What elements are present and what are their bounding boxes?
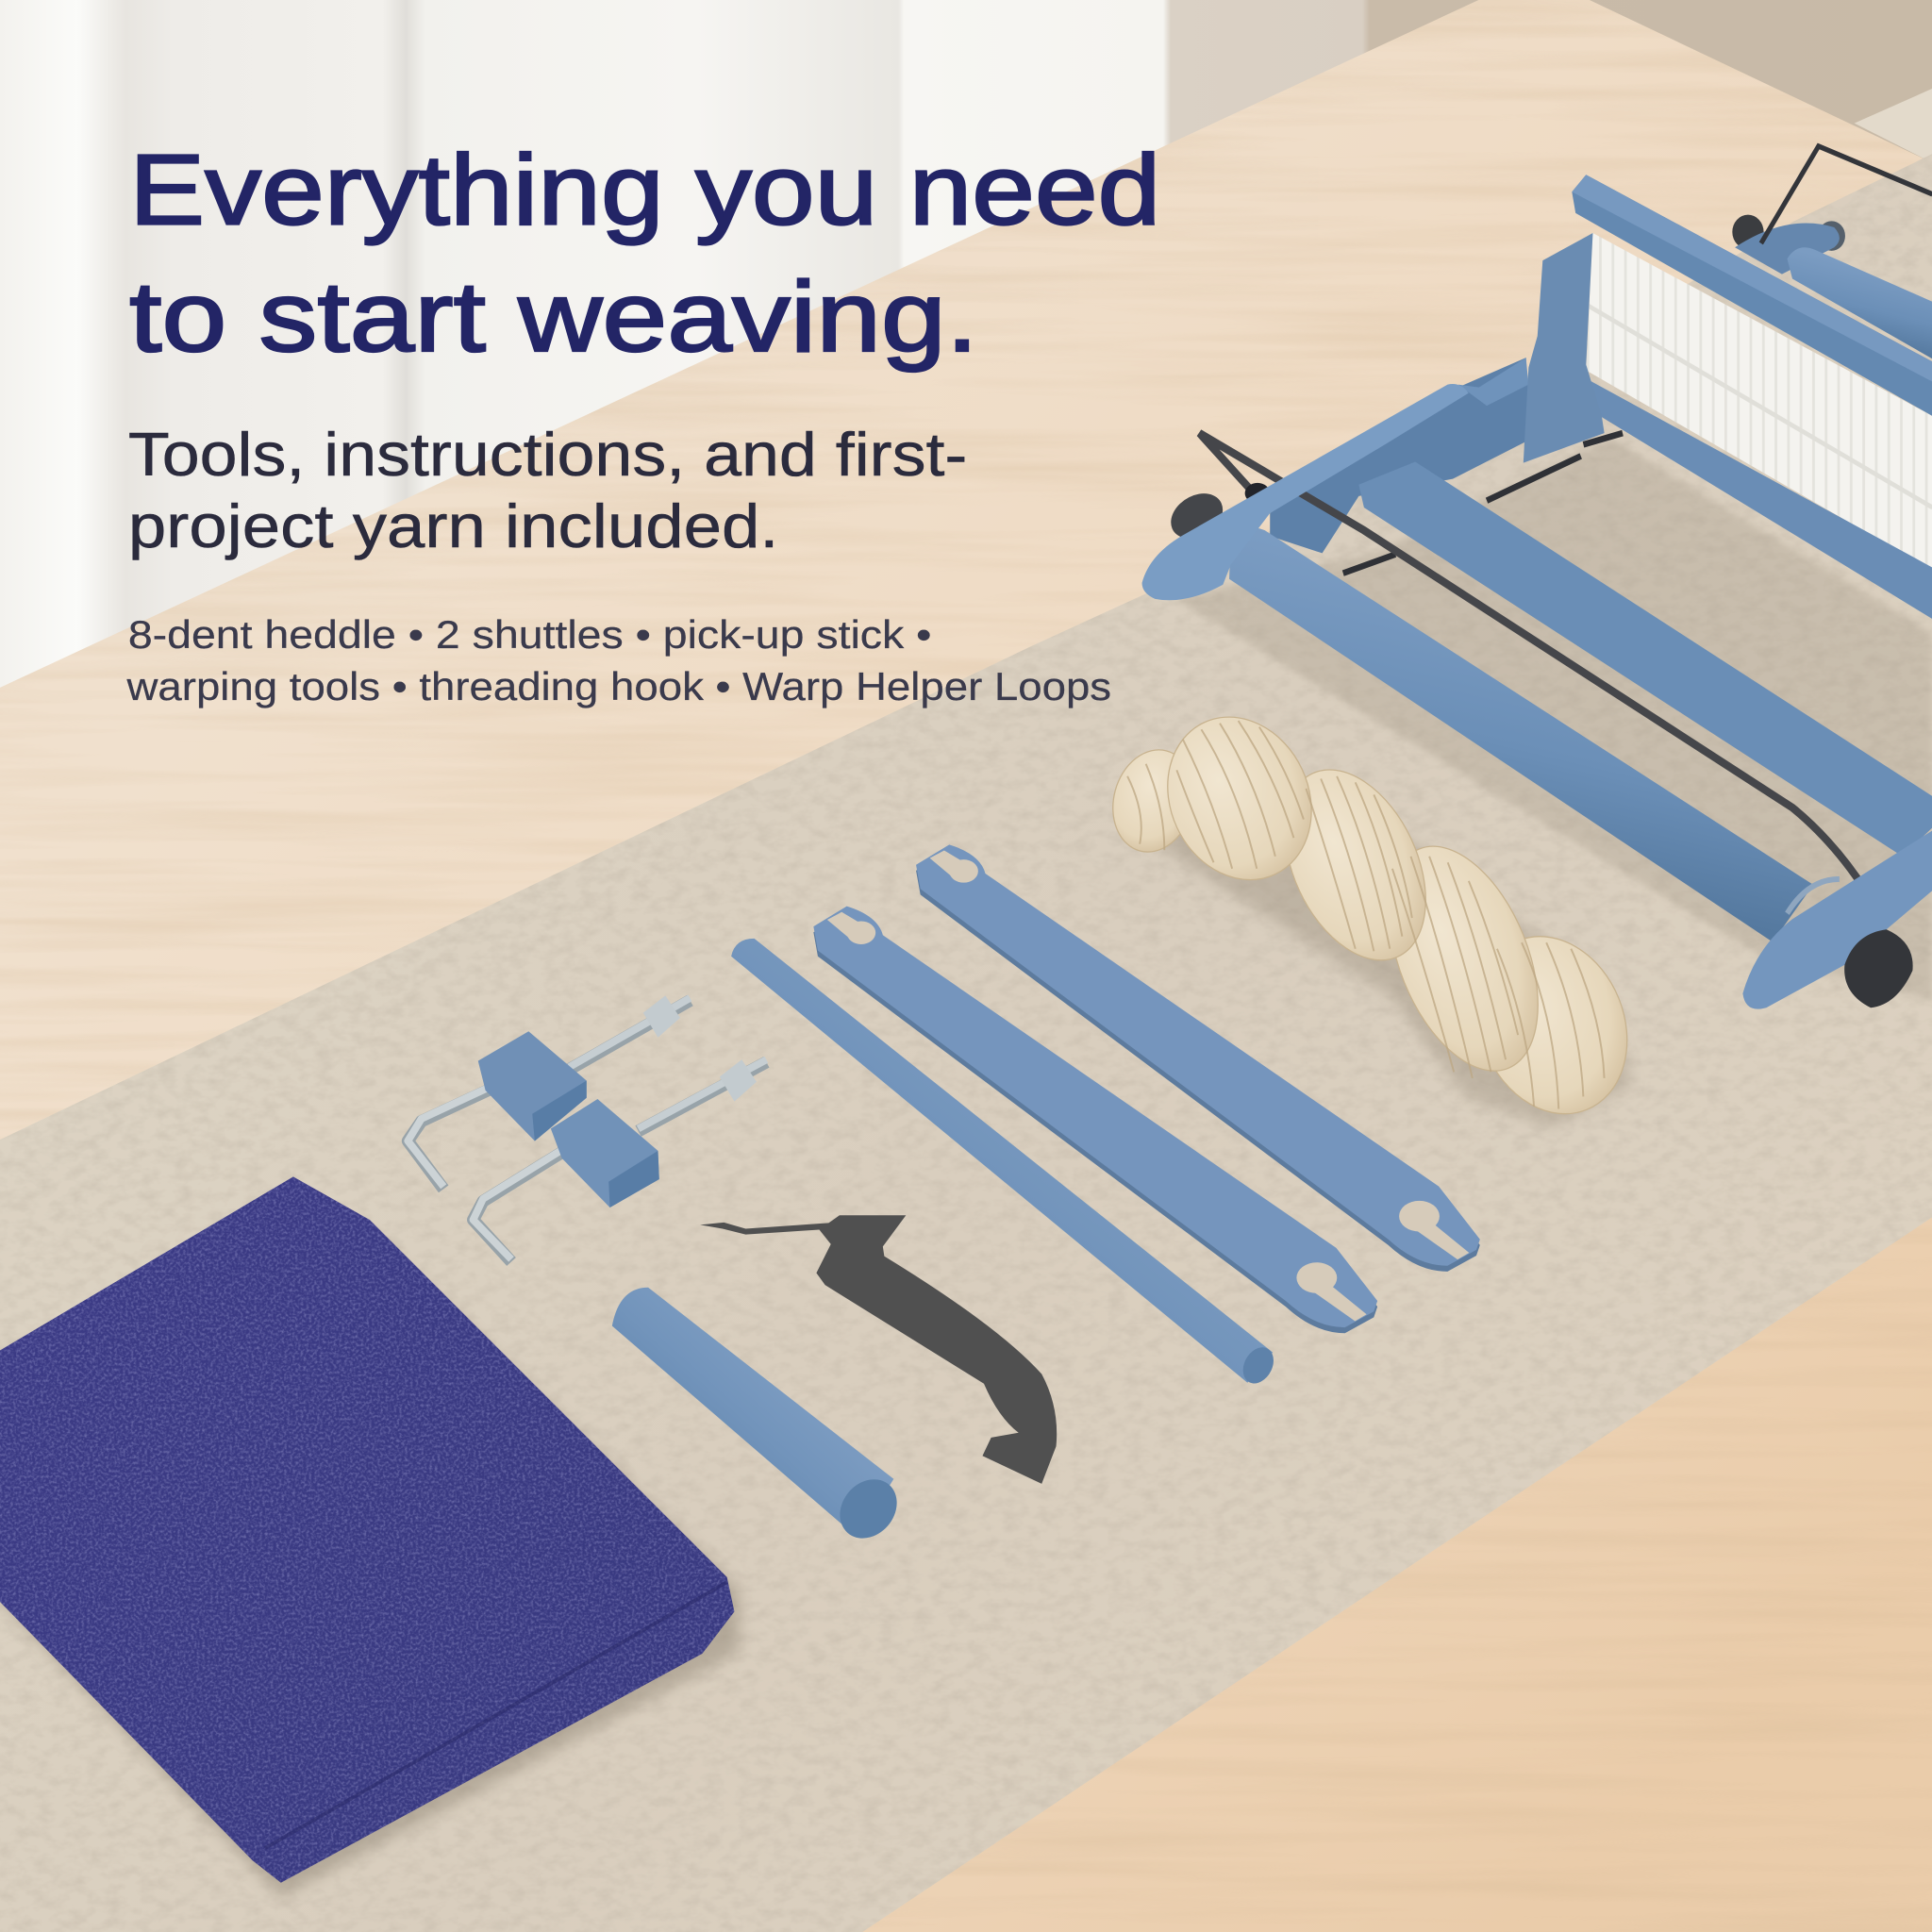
right knob <box>1844 929 1913 1008</box>
skein of yarn <box>1102 693 1653 1137</box>
rigid heddle loom <box>1142 146 1932 1009</box>
block <box>551 1099 659 1208</box>
yarn strands <box>1127 721 1605 1109</box>
included items list: 8-dent heddle • 2 shuttles • pick-up stick • <box>128 612 931 657</box>
pick-up stick <box>731 939 1278 1385</box>
subheading <box>128 420 967 560</box>
heading <box>129 135 1160 373</box>
towel shadow <box>0 1232 740 1897</box>
left pod <box>1142 384 1469 600</box>
included items list: warping tools • threading hook • Warp Helper Loops <box>125 664 1111 708</box>
folded purple towel <box>0 1158 752 1897</box>
frame rail highlight <box>1458 358 1528 406</box>
subheading: project yarn included. <box>128 491 778 560</box>
threading hook <box>700 1215 1057 1484</box>
towel body <box>0 1176 734 1883</box>
heading: to start weaving. <box>129 261 978 373</box>
heddle top bar <box>1572 175 1932 416</box>
background: curtain and wall <box>0 0 1932 740</box>
included items list <box>125 612 1111 708</box>
yarn twists <box>1102 693 1653 1137</box>
warping clamp 2 <box>474 1059 766 1261</box>
under rods <box>1343 433 1623 574</box>
back knob and pod <box>1732 215 1845 275</box>
towel texture <box>0 1158 752 1897</box>
wire ends <box>1245 483 1878 898</box>
weaving tools laid out on runner <box>612 844 1480 1541</box>
yarn shadow <box>1146 764 1633 1127</box>
front roller <box>1229 527 1840 942</box>
heddle teeth <box>1586 233 1932 571</box>
heddle block <box>1524 233 1605 463</box>
left knob <box>1164 485 1229 547</box>
rear shuttle <box>916 844 1480 1272</box>
middle beam <box>1358 461 1932 857</box>
shuttle notches <box>930 850 1469 1259</box>
side frame <box>1270 358 1531 553</box>
front shuttle <box>813 907 1377 1333</box>
loom shadow <box>1176 439 1932 999</box>
heddle bottom bar <box>1562 366 1932 619</box>
short dowel <box>612 1288 905 1541</box>
nut <box>720 1059 757 1102</box>
shuttle notches <box>827 912 1367 1321</box>
back wire <box>1761 146 1932 243</box>
right pod <box>1742 830 1932 1009</box>
front wire <box>1199 433 1866 891</box>
block <box>478 1031 587 1141</box>
heading: Everything you need <box>129 135 1160 246</box>
nut <box>643 995 680 1038</box>
towel fold <box>265 1582 727 1848</box>
back roller <box>1787 247 1932 358</box>
subheading: Tools, instructions, and first- <box>128 420 967 489</box>
warping clamp 1 <box>408 995 690 1189</box>
